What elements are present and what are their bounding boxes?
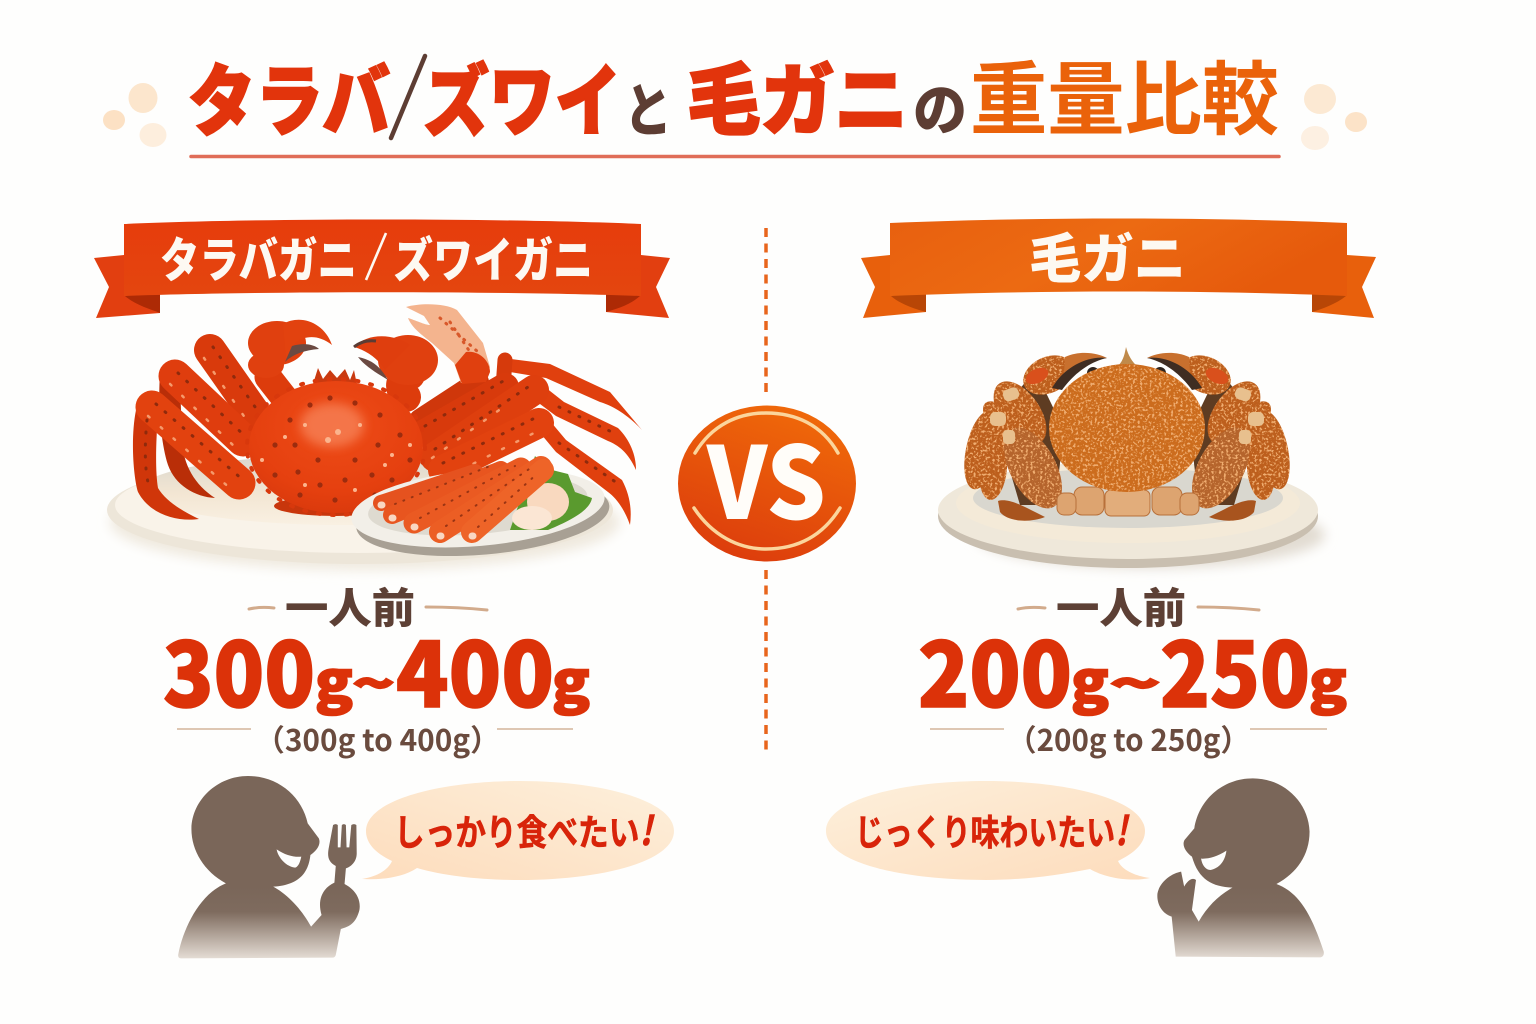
left serving size xyxy=(163,575,590,760)
plate xyxy=(938,461,1325,568)
number: weight range: 300 xyxy=(163,604,315,733)
number: weight range: ~ xyxy=(1109,645,1161,717)
illustration: king crab on plate xyxy=(107,304,642,570)
speech bubble left xyxy=(362,781,674,880)
speech bubble right xyxy=(826,781,1150,880)
right claw and legs xyxy=(1147,348,1296,521)
eyes and antennae xyxy=(1087,347,1166,379)
right legs xyxy=(420,358,642,525)
left legs xyxy=(133,347,260,520)
large plate xyxy=(107,455,620,570)
number: weight range xyxy=(918,604,1347,733)
title: の xyxy=(913,66,967,147)
label: one serving xyxy=(249,575,487,636)
carapace xyxy=(247,368,425,516)
center dashed divider xyxy=(764,228,768,756)
banner label: 毛ガニ xyxy=(1029,215,1186,294)
number: weight range: ~ xyxy=(352,645,395,717)
title: 毛ガニ xyxy=(687,39,908,151)
crab leg meat xyxy=(381,464,543,536)
title: と xyxy=(624,64,672,148)
label: one serving: 一人前 xyxy=(285,575,415,636)
carapace xyxy=(1049,364,1205,492)
banner: hairy crab xyxy=(861,215,1376,318)
banner label: タラバガニ xyxy=(160,221,357,291)
title: ズワイ xyxy=(423,40,621,152)
title: タラバ xyxy=(188,40,390,152)
banner label: ズワイガニ xyxy=(393,221,593,291)
title: 重量比較 xyxy=(970,36,1279,152)
label: one serving xyxy=(1018,575,1259,636)
right serving size xyxy=(918,575,1347,760)
figure: person savoring xyxy=(1157,778,1324,957)
number: weight range: g xyxy=(315,637,353,719)
left claw and legs xyxy=(958,348,1107,521)
bubble text: しっかり食べたい! xyxy=(394,799,655,857)
number: weight range: g xyxy=(1071,637,1109,719)
small plate with leg meat xyxy=(348,459,613,566)
caption: （300g to 400g） xyxy=(255,716,500,760)
underside plates xyxy=(1057,487,1199,516)
illustration: hairy crab on plate xyxy=(938,347,1325,568)
number: weight range: 250 xyxy=(1160,604,1310,733)
title underline xyxy=(191,155,1279,158)
bubble text: じっくり味わいたい! xyxy=(855,799,1130,857)
decorative dots: title left xyxy=(103,83,166,147)
banner: king / snow crab xyxy=(94,220,670,318)
VS label: VS xyxy=(706,403,826,548)
garnish xyxy=(510,456,592,530)
title xyxy=(188,36,1279,152)
caption: （200g to 250g） xyxy=(1007,716,1250,760)
VS badge xyxy=(678,403,856,562)
number: weight range: 200 xyxy=(918,604,1072,733)
number: weight range: g xyxy=(1309,637,1347,719)
number: weight range xyxy=(163,604,590,733)
figure: person with fork xyxy=(178,776,360,958)
label: one serving: 一人前 xyxy=(1056,575,1186,636)
number: weight range: g xyxy=(552,637,590,719)
banner label xyxy=(160,221,593,291)
decorative dots: title right xyxy=(1301,84,1367,150)
number: weight range: 400 xyxy=(396,604,554,733)
claws xyxy=(248,304,490,400)
